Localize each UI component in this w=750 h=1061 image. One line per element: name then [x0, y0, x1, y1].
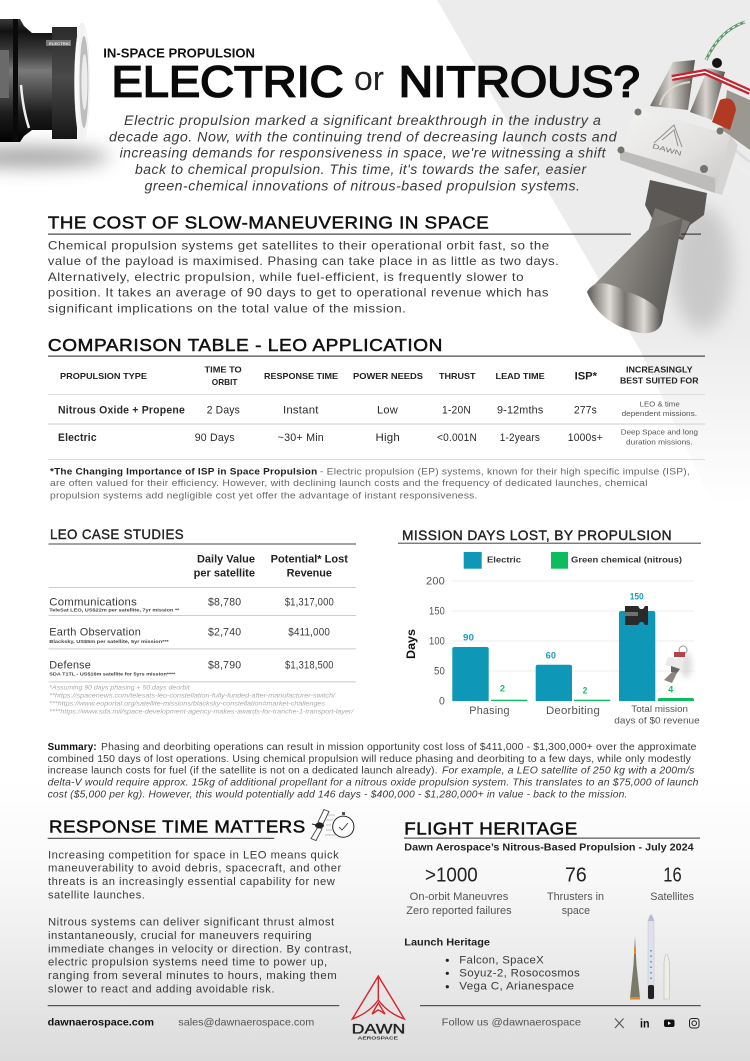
row: electric: 1-2years: [500, 432, 540, 444]
row: electric: High: [376, 432, 400, 444]
bars: total: 4: [668, 684, 673, 694]
note: importance of ISP: [50, 465, 690, 501]
row: communications: $1,317,000: [285, 596, 334, 608]
row: nitrous oxide: 9-12mths: [497, 404, 543, 416]
body paragraph: [48, 238, 559, 315]
body paragraph 2: immediate changes in velocity or direction. By contrast,: [48, 943, 352, 955]
body paragraph 2: ranging from several minutes to hours, making them: [48, 970, 337, 982]
legend: Green chemical (nitrous): [571, 555, 682, 565]
heading: THE COST OF SLOW-MANEUVERING IN SPACE: [48, 212, 489, 232]
row: electric: ~30+ Min: [278, 432, 324, 444]
stat: thrusters: 76: [565, 865, 587, 887]
column headers: Revenue: [287, 568, 332, 580]
launch heritage: Launch Heritage: [404, 938, 490, 949]
bars: total: Total mission: [631, 704, 688, 715]
table header: LEAD TIME: [496, 371, 545, 381]
body paragraph 2: electric propulsion systems need time to power up,: [48, 957, 328, 969]
summary text: For example, a LEO satellite of 250 kg with a 200m/s: [442, 766, 694, 777]
table header: ISP*: [575, 370, 598, 382]
stat: satellites: Satellites: [650, 891, 694, 903]
row: defense: [49, 660, 334, 677]
row: nitrous oxide: Nitrous Oxide + Propene: [58, 404, 185, 416]
section: comparison table: [48, 335, 705, 501]
body paragraph 1: [48, 849, 342, 901]
footnotes: *Assuming 90 days phasing + 50 days deorbit: [49, 685, 191, 692]
table header: THRUST: [439, 371, 476, 381]
y axis: [404, 576, 694, 707]
background grey diagonal panel: [437, 0, 750, 560]
row: nitrous oxide: Low: [377, 404, 398, 416]
launch heritage: Falcon, SpaceX: [459, 954, 544, 966]
section: response time matters: [48, 810, 354, 995]
row: nitrous oxide: 1-20N: [442, 404, 471, 416]
column headers: Potential* Lost: [271, 554, 348, 566]
subtitle: Dawn Aerospace’s Nitrous-Based Propulsion - July 2024: [404, 843, 694, 854]
row: earth observation: [49, 627, 330, 645]
icon: mini nitrous thruster: [664, 646, 692, 683]
row: communications: [49, 596, 334, 614]
row: earth observation: $411,000: [288, 627, 330, 639]
table header: INCREASINGLY: [626, 365, 693, 375]
row: electric: 90 Days: [195, 432, 235, 444]
table header: POWER NEEDS: [353, 371, 423, 381]
intro paragraph: green-chemical innovations of nitrous-based propulsion systems.: [144, 178, 580, 193]
table header: RESPONSE TIME: [264, 371, 338, 381]
row: electric: [58, 428, 698, 447]
summary text: cost ($5,000 per kg). However, this would potentially add 146 days - $400,000 - $1,280,000+ in value - back to the mission.: [48, 789, 628, 800]
footer left rule and contacts: dawnaerospace.com: [48, 1018, 154, 1029]
row: defense: $1,318,500: [285, 660, 334, 672]
note: importance of ISP: *The Changing Importance of ISP in Space Propulsion: [50, 465, 317, 476]
title word: or: or: [354, 60, 384, 98]
bars: phasing: Phasing: [469, 705, 510, 717]
footer right rule and social: Follow us @dawnaerospace: [442, 1018, 581, 1029]
row: defense: $8,790: [208, 660, 241, 672]
bars: total: [614, 592, 700, 726]
image: rockets: [630, 914, 669, 1000]
logo: Dawn Aerospace: [352, 976, 405, 1040]
body paragraph: position. It takes an average of 90 days to get to operational revenue which has: [48, 286, 549, 300]
legend: Electric: [487, 555, 521, 565]
heading: RESPONSE TIME MATTERS: [49, 816, 306, 836]
row: electric: Electric: [58, 432, 97, 444]
body paragraph: Chemical propulsion systems get satellites to their operational orbit fast, so the: [48, 238, 550, 252]
footnotes: **https://spacenews.com/telesats-leo-constellation-fully-funded-after-manufacturer-switch/: [49, 693, 336, 700]
footer right rule and social: [420, 1005, 701, 1030]
body paragraph 2: [48, 917, 352, 995]
heading: FLIGHT HERITAGE: [404, 818, 578, 838]
body paragraph 2: instantaneously, crucial for maneuvers requiring: [48, 930, 312, 942]
footer left rule and contacts: sales@dawnaerospace.com: [178, 1018, 314, 1029]
stat: satellites: [650, 865, 694, 903]
icon: satellite and stopwatch: [311, 810, 354, 840]
background gradient: [0, 780, 750, 1061]
row: earth observation: Earth Observation: [49, 627, 141, 639]
bars: deorbiting: 2: [583, 686, 587, 696]
icon: X: [615, 1018, 624, 1028]
bars: phasing: 90: [463, 633, 474, 643]
body paragraph 2: Nitrous systems can deliver significant thrust almost: [48, 917, 335, 929]
bars: phasing: [452, 633, 527, 717]
heading: LEO CASE STUDIES: [50, 526, 184, 542]
row: earth observation: Blacksky, US$5m per satellite, 5yr mission***: [49, 639, 169, 645]
body paragraph: significant implications on the total value of the mission.: [48, 301, 406, 315]
row: electric: 1000s+: [568, 432, 603, 444]
icon: YouTube: [664, 1020, 674, 1027]
note: importance of ISP: propulsion systems add negligible cost yet offer the advantage of instant responsiveness.: [50, 490, 478, 501]
legend: [464, 552, 682, 569]
title block: [103, 47, 640, 107]
body paragraph 1: threats is an increasingly essential capability for new: [48, 876, 335, 888]
y axis: 0: [439, 695, 445, 707]
image: electric thruster: ELECTRIC: [49, 42, 70, 46]
launch heritage: Vega C, Arianespace: [459, 981, 574, 993]
stat: thrusters: [547, 865, 604, 917]
body paragraph 1: satellite launches.: [48, 889, 145, 901]
note: importance of ISP: are often valued for their efficiency. However, with declining launch costs and the frequency of dedicated launches, chemical: [50, 477, 648, 488]
table header: [60, 365, 698, 387]
note: importance of ISP: - Electric propulsion (EP) systems, known for their high specific impulse (ISP),: [320, 465, 690, 476]
row: nitrous oxide: LEO & time: [640, 400, 680, 409]
column headers: Daily Value: [197, 554, 255, 566]
y axis: 200: [426, 576, 445, 588]
bars: phasing: 2: [500, 684, 505, 694]
section: LEO case studies: [48, 526, 356, 716]
intro paragraph: increasing demands for responsiveness in space, we're witnessing a shift: [120, 146, 607, 161]
summary text: delta-V would require approx. 15kg of additional propellant for a nitrous oxide propulsion system. This translates to an $75,000 of launch: [48, 777, 699, 788]
launch heritage: [404, 938, 580, 993]
bars: deorbiting: 60: [546, 650, 556, 660]
row: earth observation: $2,740: [208, 627, 241, 639]
eyebrow: in-space propulsion: IN-SPACE PROPULSION: [103, 47, 255, 61]
row: nitrous oxide: [58, 400, 697, 418]
section: cost of slow maneuvering: [48, 212, 701, 315]
image: nitrous thruster: DAWN: [651, 143, 683, 158]
bars: total: 150: [630, 592, 644, 602]
y axis: 100: [429, 636, 445, 648]
footnotes: [49, 685, 355, 716]
summary text: Summary:: [48, 742, 97, 753]
summary text: Phasing and deorbiting operations can result in mission opportunity cost loss of $411,000 - $1,300,000+ over the approximate: [101, 742, 697, 753]
summary text: increase launch costs for fuel (if the satellite is not on a dedicated launch already).: [48, 766, 438, 777]
column headers: [194, 554, 348, 580]
y axis: 150: [429, 606, 445, 618]
table header: ORBIT: [212, 377, 238, 387]
heading: MISSION DAYS LOST, BY PROPULSION: [402, 527, 672, 543]
section: mission days lost chart: [398, 527, 701, 726]
footnotes: ***https://www.eoportal.org/satellite-missions/blacksky-constellation#market-challenges: [49, 701, 326, 708]
image: nitrous thruster: [587, 22, 750, 333]
intro paragraph: decade ago. Now, with the continuing trend of decreasing launch costs and: [109, 129, 617, 144]
icon: LinkedIn: in: [640, 1018, 650, 1030]
launch heritage: Soyuz-2, Rosocosmos: [459, 968, 580, 980]
stat: maneuvres: On-orbit Maneuvres: [410, 891, 508, 903]
row: electric: duration missions.: [626, 438, 693, 447]
heading: COMPARISON TABLE - LEO APPLICATION: [48, 335, 443, 355]
logo: Dawn Aerospace: DAWN: [352, 1020, 405, 1036]
intro paragraph: Electric propulsion marked a significant breakthrough in the industry a: [124, 113, 601, 128]
image: electric thruster: [0, 19, 110, 167]
title word: nitrous: NITROUS?: [399, 58, 640, 107]
footnotes: ****https://www.sda.mil/space-development-agency-makes-awards-for-tranche-1-transport-layer/: [49, 709, 355, 716]
icon: Instagram: [690, 1018, 699, 1028]
bars: deorbiting: Deorbiting: [546, 705, 600, 717]
row: nitrous oxide: 277s: [574, 404, 597, 416]
column headers: per satellite: [194, 568, 255, 580]
stat: satellites: 16: [663, 865, 682, 887]
y axis: Days: [404, 629, 418, 659]
bars: deorbiting: [536, 650, 610, 717]
row: nitrous oxide: Instant: [283, 404, 319, 416]
title word: electric: ELECTRIC: [112, 58, 344, 107]
intro paragraph: [109, 113, 617, 193]
body paragraph 1: Increasing competition for space in LEO means quick: [48, 849, 339, 861]
y axis: 50: [434, 666, 445, 678]
row: nitrous oxide: 2 Days: [207, 404, 240, 416]
table header: TIME TO: [204, 365, 242, 375]
row: defense: Defense: [49, 660, 91, 672]
table header: BEST SUITED FOR: [620, 376, 698, 386]
summary text: combined 150 days of lost operations. Using chemical propulsion will reduce phasing and deorbiting to a few days, while only modestly: [48, 754, 691, 765]
stat: maneuvres: [406, 865, 512, 917]
intro paragraph: back to chemical propulsion. This time, it's towards the safer, easier: [135, 162, 587, 177]
row: electric: Deep Space and long: [621, 428, 698, 437]
row: communications: $8,780: [208, 596, 241, 608]
row: communications: TeleSat LEO, US$22m per satellite, 7yr mission **: [49, 608, 179, 614]
logo: Dawn Aerospace: AEROSPACE: [358, 1035, 398, 1040]
section: flight heritage: [404, 818, 700, 1000]
body paragraph: value of the payload is maximised. Phasing can take place in as little as two days.: [48, 254, 559, 268]
row: electric: <0.001N: [437, 432, 477, 444]
row: defense: SDA T1TL - US$16m satellite for 5yrs mission****: [49, 671, 175, 677]
bars: total: days of $0 revenue: [614, 715, 700, 726]
body paragraph: Alternatively, electric propulsion, while fuel-efficient, is frequently slower to: [48, 270, 524, 284]
summary text: [48, 742, 699, 800]
table header: PROPULSION TYPE: [60, 371, 147, 381]
stat: maneuvres: Zero reported failures: [406, 905, 512, 917]
stat: thrusters: Thrusters in: [547, 891, 604, 903]
stat: maneuvres: >1000: [425, 865, 478, 887]
icon: mini electric thruster: [625, 606, 648, 625]
body paragraph 1: maneuverability to avoid debris, spacecraft, and other: [48, 863, 342, 875]
footer left rule and contacts: [48, 1005, 339, 1029]
row: communications: Communications: [49, 596, 137, 608]
body paragraph 2: slower to react and adding avoidable risk.: [48, 983, 275, 995]
row: nitrous oxide: dependent missions.: [622, 409, 697, 418]
stat: thrusters: space: [562, 905, 590, 917]
